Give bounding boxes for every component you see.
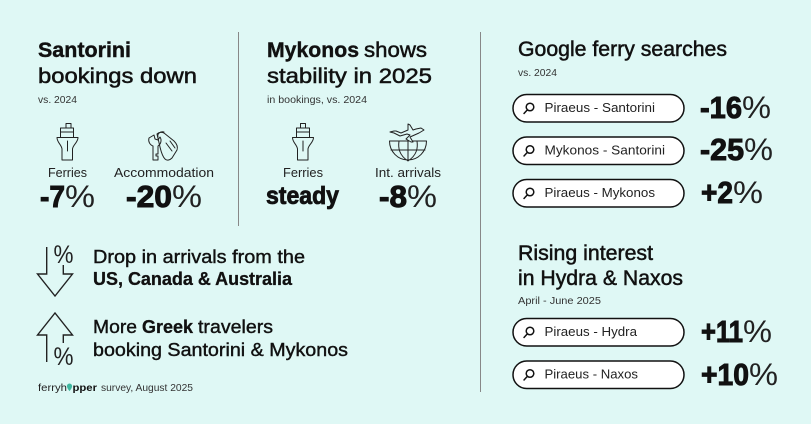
logo: ferryhopper: pper	[72, 382, 97, 394]
text: more Greek travelers: booking Santorini & Mykonos	[93, 340, 348, 360]
heading: Mykonos shows stability in 2025: shows	[364, 39, 427, 62]
search row: Piraeus - Mykonos: Piraeus - Mykonos	[544, 186, 655, 200]
icon: up arrow with percent: %	[54, 343, 74, 371]
text: more Greek travelers	[93, 317, 348, 360]
icon: key and tag	[149, 132, 177, 160]
stat: international arrivals -8%	[379, 178, 437, 214]
heading: Mykonos shows stability in 2025: stability in 2025	[267, 65, 432, 88]
heading: Mykonos shows stability in 2025	[267, 39, 432, 88]
icon: up arrow with percent	[38, 313, 74, 371]
heading: Mykonos shows stability in 2025: Mykonos	[267, 39, 359, 62]
search row: Piraeus - Mykonos: +2	[701, 175, 733, 210]
search row: Mykonos - Santorini: Mykonos - Santorini	[544, 144, 665, 158]
search row: Piraeus - Hydra: Piraeus - Hydra	[544, 325, 637, 339]
text: drop in arrivals	[93, 247, 305, 289]
search row: Piraeus - Santorini: %	[742, 89, 771, 125]
text: more Greek travelers: Greek	[142, 317, 194, 337]
label: Int. arrivals: Int. arrivals	[375, 165, 442, 180]
heading: in Hydra & Naxos	[518, 267, 683, 290]
search row: Piraeus - Hydra: +11	[701, 314, 743, 349]
panel: Google ferry searches	[513, 38, 773, 210]
panel: Mykonos stability	[266, 39, 442, 214]
logo: ferryhopper	[38, 382, 97, 394]
search row: Piraeus - Mykonos: %	[733, 174, 763, 210]
text: more Greek travelers: More	[93, 317, 137, 337]
stat: international arrivals -8%: %	[407, 178, 437, 214]
heading: Google ferry searches	[518, 38, 727, 61]
subheading: vs. 2024	[518, 68, 557, 79]
panel: Santorini bookings	[38, 39, 214, 214]
search row: Piraeus - Naxos: %	[749, 356, 778, 392]
icon: down arrow with percent: %	[54, 241, 74, 269]
label: Ferries: Ferries	[283, 165, 323, 180]
subheading: in bookings, vs. 2024	[267, 95, 367, 106]
label: Ferries: Ferries	[48, 165, 87, 180]
stat: ferries -7%	[40, 178, 95, 214]
panel: Rising interest in Hydra and Naxos	[513, 242, 778, 392]
stat: ferries steady: steady	[266, 182, 339, 210]
heading: Santorini bookings down: Santorini	[38, 39, 131, 62]
search row: Piraeus - Santorini: -16	[700, 90, 742, 125]
subheading: April - June 2025	[518, 296, 601, 307]
icon: ferry	[292, 124, 314, 160]
stat: accommodation -20%: %	[172, 178, 202, 214]
heading: Santorini bookings down	[38, 39, 197, 88]
label: Accommodation: Accommodation	[114, 165, 214, 180]
callout: more Greek travelers	[38, 313, 348, 371]
stat: ferries -7%: %	[65, 178, 95, 214]
search row: Piraeus - Naxos: +10	[701, 357, 749, 392]
stat: international arrivals -8%: -8	[379, 179, 407, 214]
source text: survey, August 2025	[101, 382, 193, 394]
heading: Rising interest	[518, 242, 653, 265]
text: more Greek travelers: travelers	[198, 317, 273, 337]
stat: ferries -7%: -7	[40, 179, 65, 214]
text: drop in arrivals: Drop in arrivals from the	[93, 247, 305, 267]
search row: Piraeus - Hydra	[513, 313, 772, 349]
search row: Piraeus - Santorini: Piraeus - Santorini	[544, 101, 655, 115]
heading	[518, 242, 683, 290]
search row: Mykonos - Santorini	[513, 131, 773, 167]
subheading: vs. 2024	[38, 95, 77, 106]
stat: accommodation -20%	[126, 178, 202, 214]
search row: Mykonos - Santorini: -25	[700, 132, 744, 167]
stat: accommodation -20%: -20	[126, 179, 172, 214]
heading: Santorini bookings down: bookings down	[38, 65, 197, 88]
footer: source	[38, 382, 193, 394]
search row: Piraeus - Naxos: Piraeus - Naxos	[544, 368, 638, 382]
search row: Mykonos - Santorini: %	[744, 131, 773, 167]
icon: ferry	[57, 124, 78, 160]
search row: Piraeus - Mykonos	[513, 174, 763, 210]
callout: drop in arrivals	[38, 241, 305, 296]
text: drop in arrivals: US, Canada & Australia	[93, 269, 293, 289]
logo: ferryhopper: ferryh	[38, 382, 67, 394]
icon: down arrow with percent	[38, 241, 74, 296]
icon: plane over globe	[390, 124, 426, 161]
search row: Piraeus - Hydra: %	[743, 313, 772, 349]
search row: Piraeus - Santorini	[513, 89, 771, 125]
search row: Piraeus - Naxos	[513, 356, 778, 392]
